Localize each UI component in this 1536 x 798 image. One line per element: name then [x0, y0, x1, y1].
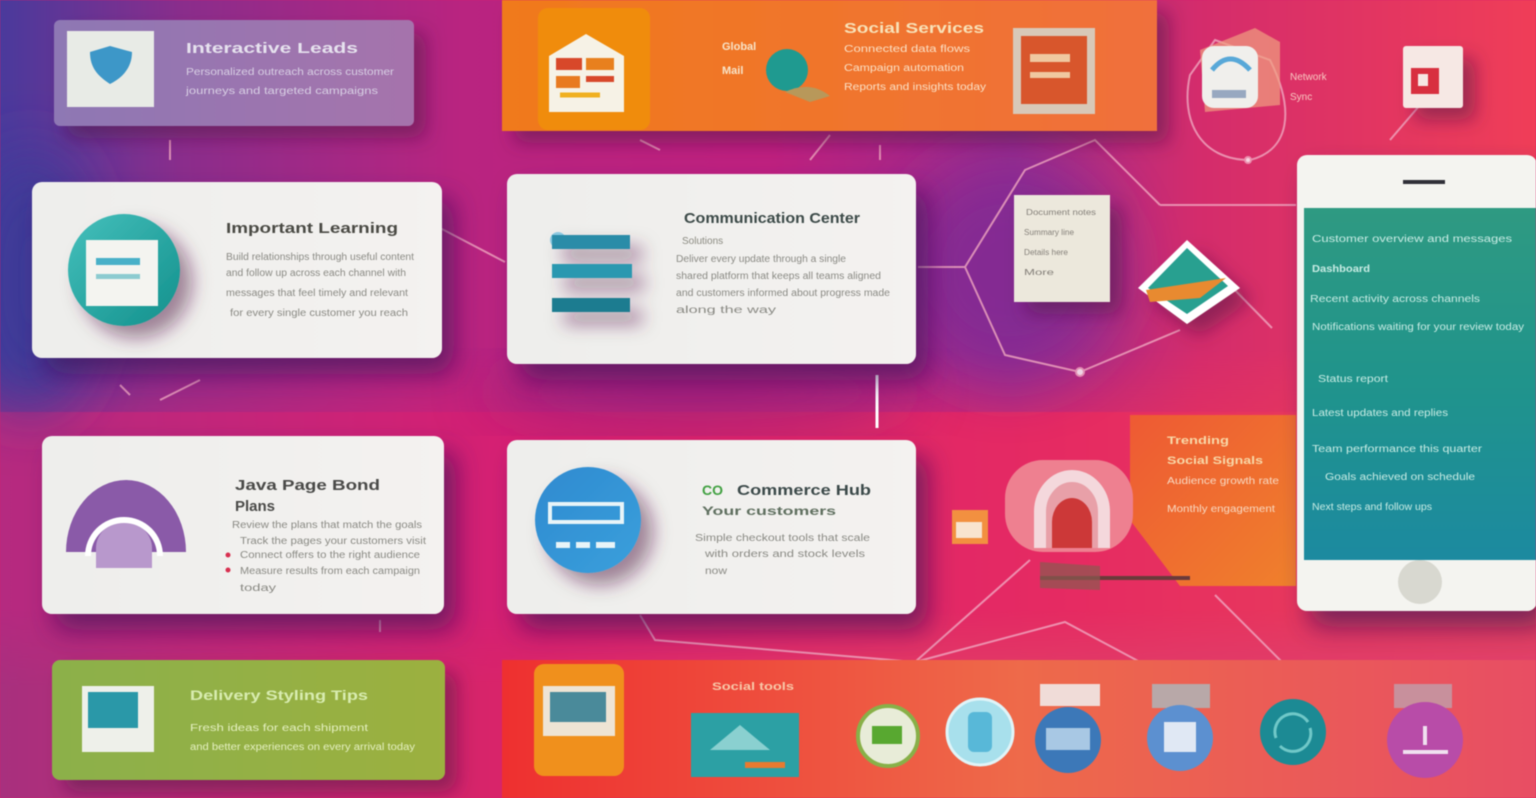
panel: bottom green banner — [52, 660, 445, 780]
panel: orange callout: Social Signals — [1167, 455, 1263, 467]
icon: teal circle — [68, 214, 180, 326]
connector network — [120, 40, 1420, 665]
card text: today — [240, 583, 276, 594]
phone speaker — [1403, 180, 1445, 184]
banner heading: Delivery Styling Tips — [190, 687, 368, 703]
panel: card two — [507, 174, 916, 364]
phone — [1297, 155, 1536, 611]
phone screen — [1304, 208, 1536, 560]
icon: orange envelope tile — [538, 8, 650, 130]
card text: now — [705, 566, 728, 577]
card text: Track the pages your customers visit — [240, 536, 426, 547]
card heading: Java Page Bond — [235, 477, 380, 494]
card text: messages that feel timely and relevant — [226, 288, 408, 299]
icon: blue cart circle — [535, 467, 641, 573]
banner text: journeys and targeted campaigns — [185, 86, 378, 97]
card text: Simple checkout tools that scale — [695, 533, 871, 544]
banner text: Campaign automation — [844, 63, 964, 74]
icon: magenta circle with label — [1387, 684, 1463, 778]
callout text: Audience growth rate — [1167, 476, 1280, 487]
phone screen text: Dashboard — [1312, 264, 1370, 275]
panel: card three — [42, 436, 444, 614]
icon: small orange tile — [952, 510, 988, 544]
strip label: Social tools — [712, 681, 794, 693]
phone screen text — [1310, 234, 1524, 513]
panel: card one — [32, 182, 442, 358]
card text — [676, 254, 890, 316]
phone screen text: Status report — [1318, 374, 1388, 385]
icon: document: Details here — [1024, 248, 1069, 257]
icon: monitor — [82, 686, 154, 752]
banner heading: Social Services — [844, 20, 984, 37]
banner text — [185, 67, 395, 97]
card text — [226, 252, 414, 319]
card heading: Important Learning — [226, 220, 398, 237]
card text: and customers informed about progress made — [676, 288, 890, 299]
icon: top right wifi badge: Sync — [1290, 92, 1312, 103]
card text: Build relationships through useful content — [226, 252, 414, 263]
icon: pink arch — [1005, 460, 1190, 590]
icon: orange picture tile — [534, 664, 624, 776]
card text: and follow up across each channel with — [226, 268, 406, 279]
card text: Review the plans that match the goals — [232, 520, 422, 531]
small labels and globe: Global — [722, 41, 756, 53]
icon: blue circle with label — [1035, 684, 1101, 773]
icon: purple arch — [66, 480, 186, 568]
panel: card three: Plans — [235, 498, 275, 515]
card text: shared platform that keeps all teams aligned — [676, 271, 881, 282]
banner text: and better experiences on every arrival today — [190, 742, 415, 753]
panel: top orange banner — [502, 0, 1157, 131]
banner text: Reports and insights today — [844, 82, 986, 93]
card heading: Communication Center — [684, 210, 860, 227]
small labels and globe: Mail — [722, 65, 743, 77]
card text: along the way — [676, 305, 776, 316]
icon: teal house card — [691, 713, 799, 777]
icon: document — [1014, 195, 1110, 302]
icon: document: Summary line — [1024, 228, 1075, 237]
icon: diamond landscape — [1138, 240, 1240, 324]
card subheading: Solutions — [682, 236, 723, 247]
card heading: CO — [702, 482, 723, 498]
card subheading: Your customers — [702, 504, 836, 518]
phone screen text: Notifications waiting for your review today — [1312, 322, 1524, 333]
phone screen text: Next steps and follow ups — [1312, 502, 1432, 513]
card text — [695, 533, 871, 577]
icon: teal sync circle — [1260, 699, 1326, 765]
icon: server stack — [550, 232, 632, 312]
card text — [232, 520, 426, 594]
card text: Connect offers to the right audience — [240, 550, 420, 561]
banner text: Personalized outreach across customer — [186, 67, 395, 78]
icon: document: More — [1024, 268, 1055, 277]
panel: top left banner — [54, 20, 414, 126]
callout text — [1167, 476, 1280, 515]
card text: for every single customer you reach — [230, 308, 408, 319]
icon: report tile — [1013, 28, 1095, 114]
callout heading: Trending — [1167, 435, 1229, 447]
banner text — [190, 723, 415, 753]
icon: top right app tile — [1403, 46, 1463, 108]
icon: document: Document notes — [1026, 208, 1096, 217]
banner text: Connected data flows — [844, 44, 970, 55]
icon: periwinkle circle with label — [1147, 684, 1213, 771]
phone screen text: Team performance this quarter — [1312, 444, 1483, 455]
card text: Measure results from each campaign — [240, 566, 420, 577]
panel: orange callout — [1130, 415, 1296, 586]
panel: card four — [507, 440, 916, 614]
callout text: Monthly engagement — [1167, 504, 1275, 515]
icon: light blue circle — [947, 699, 1013, 765]
card text: with orders and stock levels — [704, 549, 865, 560]
phone screen text: Goals achieved on schedule — [1325, 472, 1476, 483]
card text: Deliver every update through a single — [676, 254, 846, 265]
phone home button — [1398, 560, 1442, 604]
phone screen text: Customer overview and messages — [1312, 234, 1512, 245]
panel: card four: Commerce Hub — [737, 482, 871, 499]
icon: top right wifi badge: Network — [1290, 72, 1328, 83]
banner text: Fresh ideas for each shipment — [190, 723, 368, 734]
phone screen text: Latest updates and replies — [1312, 408, 1448, 419]
small labels and globe — [722, 41, 830, 102]
banner heading: Interactive Leads — [186, 40, 358, 57]
panel: bottom icon strip — [502, 660, 1536, 798]
icon: top right wifi badge — [1200, 28, 1328, 112]
icon: green circle — [858, 706, 918, 766]
phone screen text: Recent activity across channels — [1310, 294, 1480, 305]
icon: shield card — [67, 31, 154, 107]
banner text — [844, 44, 986, 93]
